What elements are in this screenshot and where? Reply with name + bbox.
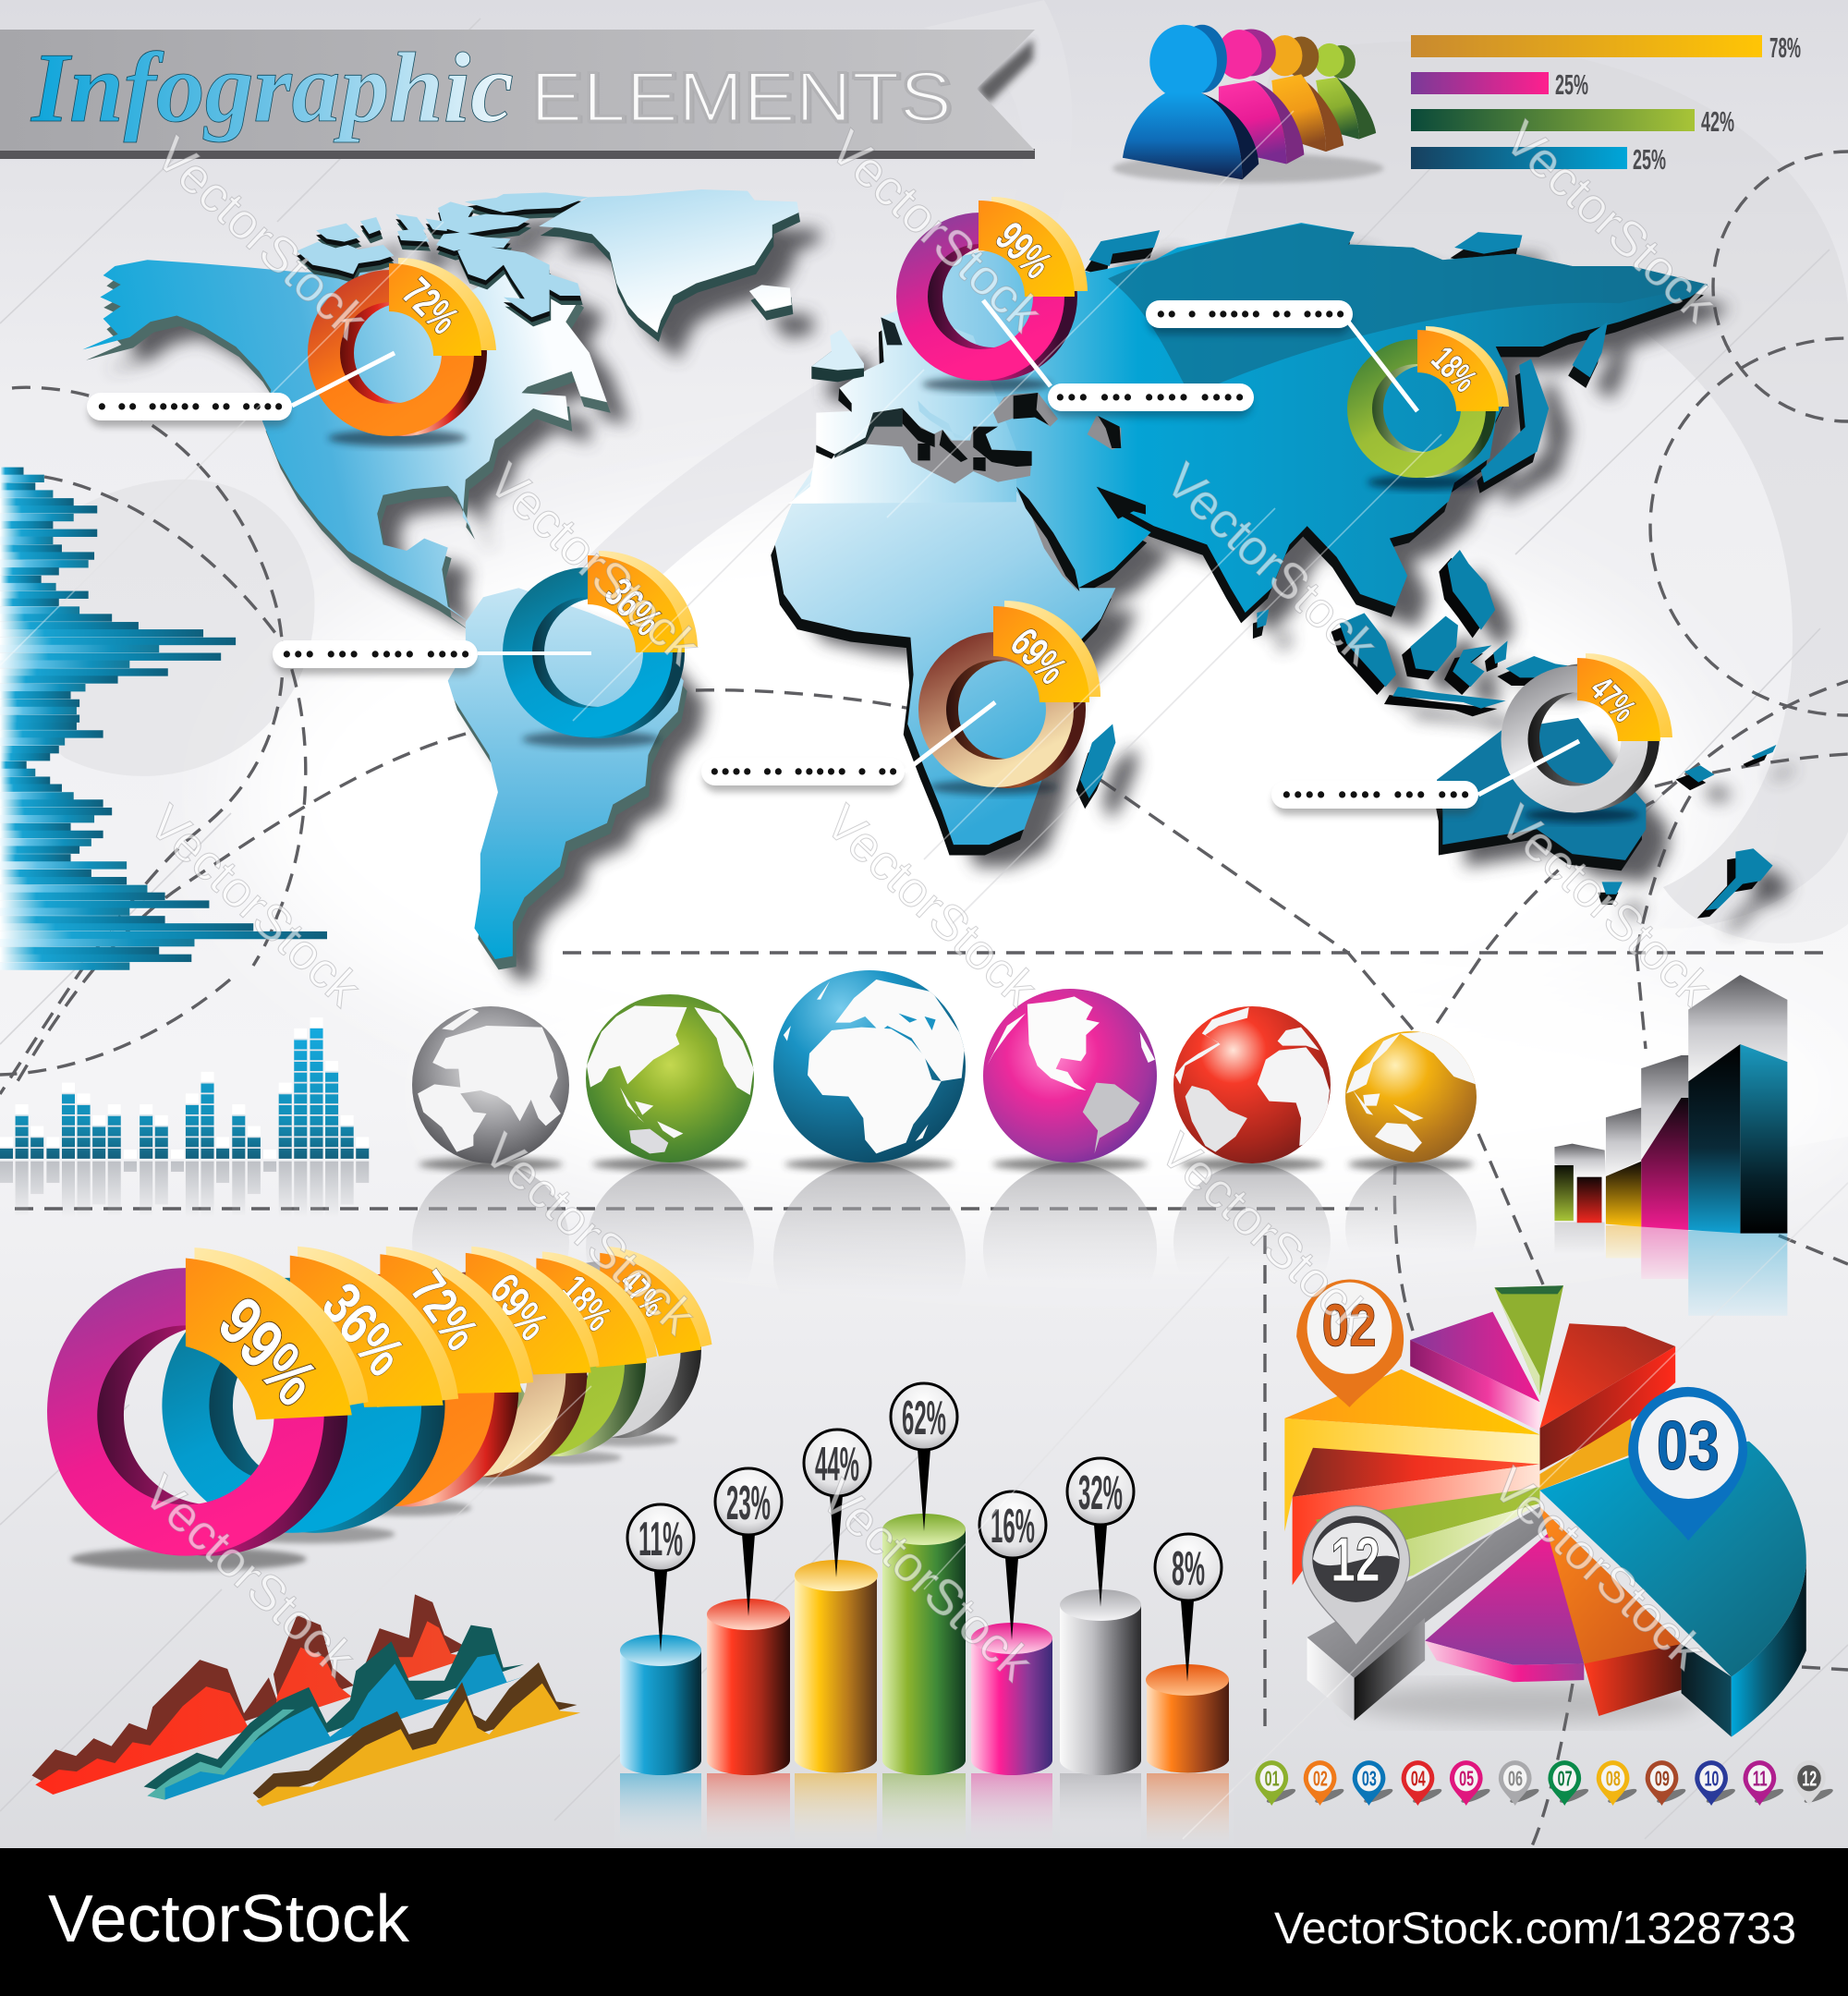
persian gulf bbox=[1097, 487, 1146, 519]
donut 69 percent: 69% bbox=[1002, 618, 1076, 693]
connector and label bbox=[983, 300, 1254, 418]
watermarks: VectorStock bbox=[815, 795, 1048, 1017]
green spike slice bbox=[1494, 1285, 1563, 1395]
donut 36 percent: 36% bbox=[596, 568, 672, 644]
pin 11 bbox=[1744, 1760, 1784, 1806]
pin 02: 02 bbox=[1313, 1767, 1328, 1791]
pin 06 bbox=[1499, 1760, 1540, 1806]
building reflection bbox=[1554, 1223, 1787, 1316]
bar 25 percent blue bbox=[1411, 147, 1627, 169]
percentage bars top right: 25% bbox=[1633, 143, 1666, 176]
gold globe bbox=[1345, 1031, 1477, 1162]
watermarks: VectorStock bbox=[1489, 795, 1722, 1017]
donut 69 percent bbox=[701, 601, 1100, 795]
donut 47 percent bbox=[1271, 653, 1672, 822]
world map bbox=[82, 189, 1776, 969]
south america bbox=[448, 588, 684, 959]
cylinder 23 percent: 23% bbox=[726, 1477, 771, 1530]
watermarks: VectorStock bbox=[478, 453, 711, 675]
magenta slice bbox=[1425, 1533, 1584, 1682]
pin 08: 08 bbox=[1606, 1767, 1621, 1791]
cylinder 44 percent: 44% bbox=[815, 1438, 859, 1491]
watermarks: VectorStock bbox=[810, 1469, 1043, 1692]
pin 10: 10 bbox=[1704, 1767, 1719, 1791]
cylinder reflections bbox=[614, 1773, 1234, 1844]
pin 12 bbox=[1302, 1506, 1410, 1646]
pin 07 bbox=[1548, 1760, 1589, 1806]
blue globe bbox=[773, 970, 966, 1162]
donut 18 percent bbox=[1146, 300, 1509, 490]
watermarks: VectorStock bbox=[1149, 1123, 1382, 1345]
cylinder 8 percent: 8% bbox=[1172, 1542, 1205, 1596]
red upper slice bbox=[1540, 1323, 1675, 1491]
light green slice bbox=[1316, 1487, 1540, 1599]
donut 99 percent bbox=[912, 197, 1254, 418]
map extrusion bbox=[86, 233, 1704, 969]
north america bbox=[82, 260, 607, 622]
equalizer columns bbox=[0, 1028, 369, 1159]
cylinder 16 percent bbox=[971, 1491, 1052, 1775]
pin 06: 06 bbox=[1508, 1767, 1523, 1791]
donut 72 percent: 72% bbox=[394, 268, 468, 343]
pin 10 bbox=[1695, 1760, 1736, 1806]
western hemisphere and main continents bbox=[82, 223, 1708, 969]
footer brand: VectorStock bbox=[48, 1882, 410, 1956]
equalizer reflection bbox=[0, 1162, 369, 1217]
connector and label bbox=[701, 702, 995, 792]
orange stack ring bbox=[280, 1247, 533, 1515]
pin 12: 12 bbox=[1331, 1524, 1380, 1595]
pin 07: 07 bbox=[1558, 1767, 1573, 1791]
uk bbox=[811, 330, 864, 382]
cylinder 62 percent: 62% bbox=[902, 1392, 946, 1445]
silver slice bbox=[1307, 1506, 1549, 1721]
mediterranean sea bbox=[816, 400, 1032, 483]
percentage bars top right bbox=[1411, 31, 1801, 176]
watermarks: VectorStock bbox=[133, 1465, 366, 1687]
map shadow bbox=[104, 217, 1794, 981]
purple slice bbox=[1410, 1312, 1540, 1431]
pin 02 bbox=[1296, 1280, 1404, 1407]
bar 25 percent magenta bbox=[1411, 72, 1549, 94]
person pink bbox=[1217, 29, 1304, 164]
cylinder 11 percent bbox=[620, 1504, 701, 1775]
watermarks: VectorStock bbox=[145, 127, 378, 349]
globes bbox=[412, 970, 1477, 1355]
pin 03 bbox=[1628, 1387, 1747, 1540]
pink stack ring: 99% bbox=[205, 1283, 330, 1421]
equalizer chart bbox=[0, 1017, 371, 1217]
bar 78 percent bbox=[1411, 35, 1762, 57]
cylinder 44 percent bbox=[795, 1430, 878, 1773]
person orange bbox=[1267, 35, 1343, 152]
pin 12 small bbox=[1793, 1760, 1834, 1806]
equalizer top cells bbox=[0, 1017, 369, 1147]
islands bbox=[1080, 230, 1623, 895]
watermarks: VectorStock bbox=[1482, 1457, 1715, 1680]
pin 02: 02 bbox=[1322, 1293, 1377, 1359]
percentage bars top right: 78% bbox=[1769, 31, 1801, 64]
watermarks: VectorStock bbox=[820, 120, 1052, 343]
arctic islands and greenland bbox=[297, 189, 800, 342]
arctic archipelago bbox=[297, 192, 589, 317]
bar 42 percent bbox=[1411, 109, 1695, 131]
australia bbox=[1437, 718, 1646, 860]
teal mountain bbox=[144, 1625, 528, 1800]
europe and mediterranean bbox=[788, 308, 1146, 591]
orange stack ring: 72% bbox=[401, 1260, 489, 1361]
globe reflections bbox=[412, 1162, 1477, 1355]
pin 04: 04 bbox=[1411, 1767, 1426, 1791]
connector and label bbox=[1271, 741, 1579, 815]
cylinder 32 percent bbox=[1060, 1458, 1141, 1775]
3D pie chart bbox=[1284, 1280, 1806, 1737]
green globe bbox=[586, 994, 754, 1162]
watermarks: VectorStock bbox=[1494, 111, 1727, 334]
3D building bar chart bbox=[1554, 975, 1787, 1316]
eurasia bbox=[882, 223, 1708, 613]
cylinder 23 percent bbox=[707, 1468, 790, 1775]
caspian sea bbox=[1088, 416, 1121, 450]
donut 18 percent: 18% bbox=[1424, 340, 1484, 400]
connector and label: ••• ••• •••• •••• bbox=[283, 641, 469, 667]
donut 47 percent: 47% bbox=[1583, 670, 1643, 730]
brown stack ring: 69% bbox=[480, 1264, 556, 1350]
pin 09 bbox=[1646, 1760, 1687, 1806]
donut 72 percent bbox=[87, 258, 496, 446]
blue stack ring: 36% bbox=[310, 1269, 417, 1389]
percentage bars top right: 42% bbox=[1701, 105, 1734, 138]
yellow slice bbox=[1284, 1369, 1540, 1531]
connector and label bbox=[1146, 300, 1417, 411]
green stack ring: 18% bbox=[554, 1266, 619, 1339]
red slice bbox=[1293, 1448, 1540, 1585]
person green bbox=[1315, 43, 1376, 140]
pin 05 bbox=[1450, 1760, 1491, 1806]
watermarks: VectorStock bbox=[139, 795, 371, 1017]
yellow mountain bbox=[253, 1662, 580, 1807]
person blue bbox=[1123, 25, 1258, 179]
pink stack ring bbox=[47, 1248, 369, 1571]
watermarks: VectorStock bbox=[473, 1123, 706, 1345]
numbered pin row bbox=[1255, 1760, 1834, 1806]
pin 05: 05 bbox=[1459, 1767, 1474, 1791]
blue stack ring bbox=[162, 1247, 458, 1543]
pin 03 bbox=[1353, 1760, 1394, 1806]
pin 09: 09 bbox=[1655, 1767, 1670, 1791]
horizontal bar histogram bbox=[0, 468, 327, 970]
cylinder 11 percent: 11% bbox=[638, 1513, 683, 1566]
black sea bbox=[993, 393, 1058, 427]
red mountain bbox=[31, 1594, 471, 1795]
pin 04 bbox=[1402, 1760, 1443, 1806]
silver stack ring bbox=[521, 1247, 711, 1446]
africa bbox=[775, 449, 1115, 845]
red sea bbox=[1016, 487, 1079, 591]
pin 03: 03 bbox=[1657, 1407, 1720, 1485]
donut 99 percent: 99% bbox=[987, 213, 1062, 287]
connector and label: • •• ••••• •• •••• bbox=[98, 394, 283, 420]
red globe bbox=[1173, 1006, 1331, 1163]
southeast asia islands and new zealand bbox=[1331, 550, 1776, 919]
cylinder 8 percent bbox=[1146, 1534, 1229, 1773]
blue slice bbox=[1540, 1442, 1806, 1737]
connector and label: •••• •• ••••• • •• bbox=[711, 759, 897, 785]
pin 02 bbox=[1304, 1760, 1345, 1806]
footer bar bbox=[0, 1848, 1848, 1996]
silver stack ring: 47% bbox=[614, 1261, 671, 1324]
brown stack ring bbox=[377, 1247, 600, 1486]
greenland bbox=[539, 189, 798, 333]
connector and label: •• • ••••• •• •••• bbox=[1157, 301, 1344, 327]
pin 08 bbox=[1597, 1760, 1638, 1806]
percentage bars top right: 25% bbox=[1555, 68, 1588, 101]
cylinder 62 percent bbox=[882, 1383, 966, 1775]
orange slice bbox=[1540, 1506, 1682, 1716]
silver globe bbox=[412, 1006, 569, 1163]
cylinder 32 percent: 32% bbox=[1078, 1467, 1123, 1520]
globe shadows bbox=[419, 1158, 1474, 1171]
title: Infographic bbox=[30, 33, 514, 143]
pin 12 small: 12 bbox=[1802, 1767, 1817, 1791]
donut 36 percent bbox=[273, 551, 698, 748]
people icon bbox=[1112, 25, 1383, 183]
connector and label bbox=[87, 353, 395, 427]
connector and label: •••• •••• ••• ••• bbox=[1283, 782, 1469, 808]
pin 03: 03 bbox=[1362, 1767, 1377, 1791]
title second word: ELEMENTS bbox=[532, 59, 954, 138]
pin 01: 01 bbox=[1265, 1767, 1280, 1791]
3D mountain charts bbox=[31, 1594, 580, 1807]
banner bbox=[0, 30, 1035, 159]
footer url: VectorStock.com/1328733 bbox=[1274, 1905, 1796, 1953]
green stack ring bbox=[454, 1251, 657, 1464]
watermarks: VectorStock bbox=[1155, 453, 1388, 675]
cylinder 16 percent: 16% bbox=[991, 1500, 1035, 1553]
large 3D donut stack bbox=[47, 1247, 711, 1571]
connector and label bbox=[273, 640, 591, 675]
pink globe bbox=[983, 989, 1157, 1162]
pin 01 bbox=[1255, 1760, 1296, 1806]
connector and label: ••• ••• •••• •••• bbox=[1056, 384, 1244, 410]
title second word: ELEMENTS bbox=[530, 58, 952, 137]
pin 11: 11 bbox=[1753, 1767, 1768, 1791]
